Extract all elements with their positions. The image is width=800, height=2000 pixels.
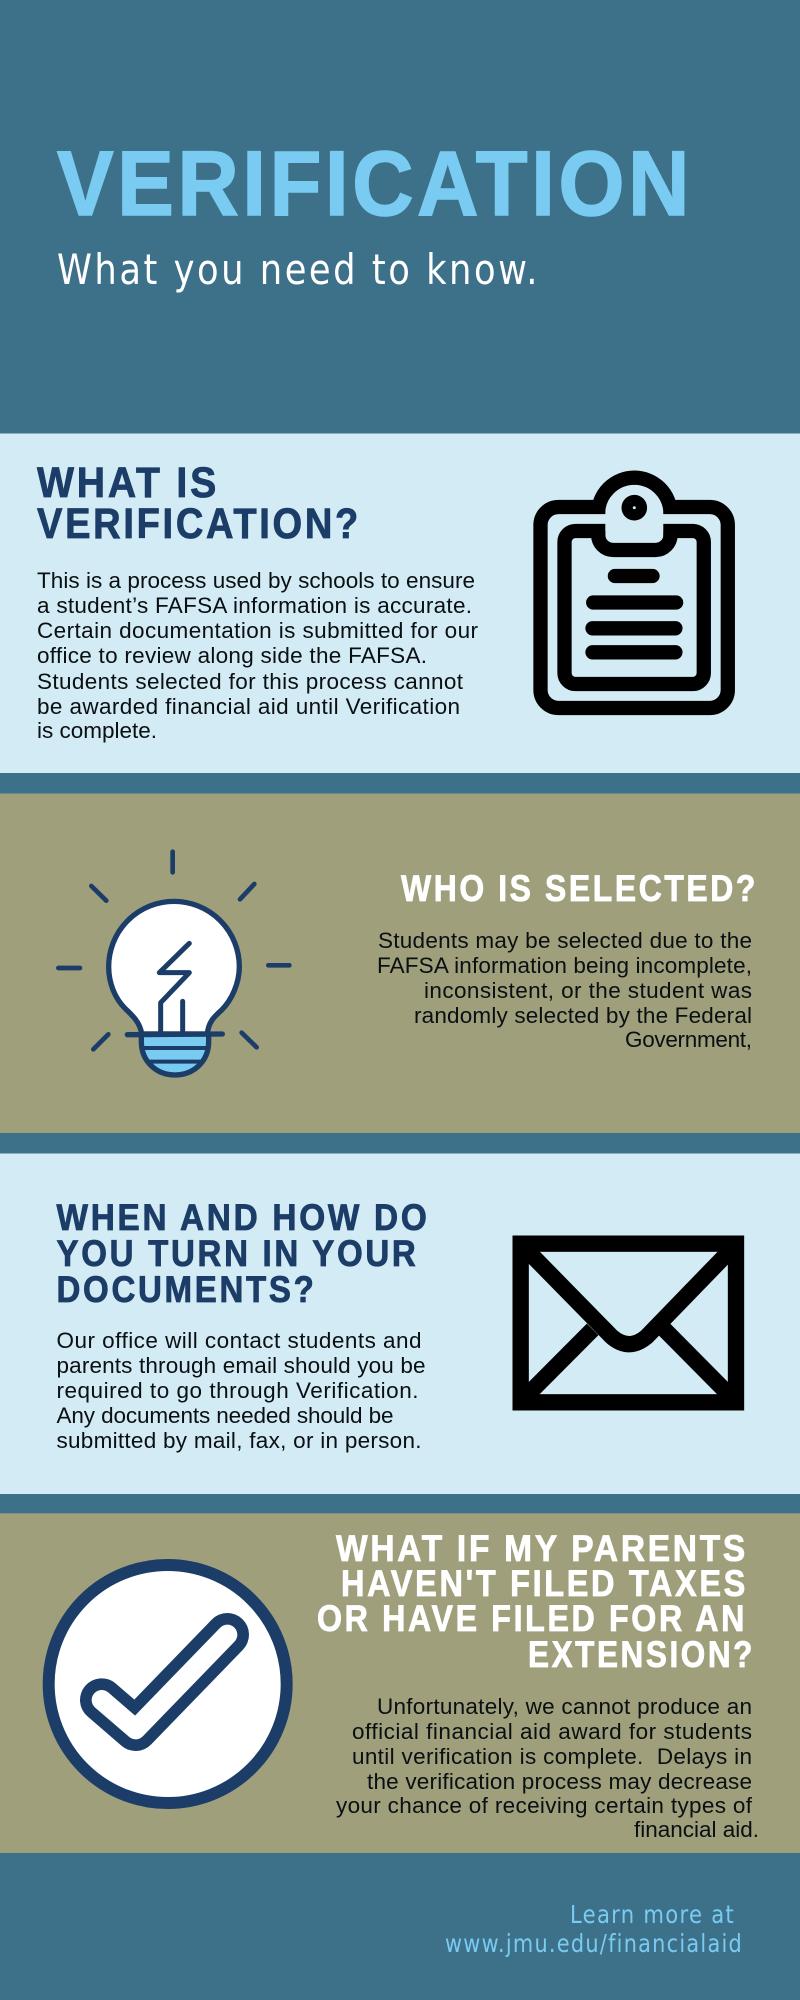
text block: what is verification: is complete. <box>37 718 157 743</box>
heading: parents taxes: EXTENSION? <box>528 1634 755 1675</box>
text block: parents taxes: the verification process may decrease <box>367 1769 752 1794</box>
text block: what is verification: a student’s FAFSA information is accurate. <box>37 593 472 618</box>
panel: parents taxes <box>0 1513 800 1853</box>
footer: learn more: Learn more at <box>570 1900 735 1929</box>
heading: when and how <box>56 1197 430 1310</box>
footer: learn more <box>445 1900 743 1958</box>
text block: when and how: Our office will contact students and <box>56 1328 422 1353</box>
heading: when and how: YOU TURN IN YOUR <box>56 1233 418 1274</box>
text block: parents taxes: until verification is complete. Delays in <box>352 1744 752 1769</box>
subtitle: What you need to know. <box>57 245 540 294</box>
icon: clipboard <box>540 478 728 708</box>
heading: what is verification <box>37 460 361 548</box>
text block: parents taxes: financial aid. <box>634 1817 759 1842</box>
text block: when and how: submitted by mail, fax, or in person. <box>56 1428 422 1453</box>
panel: when and how <box>0 1154 800 1494</box>
text block: when and how: parents through email should you be <box>56 1353 426 1378</box>
heading: what is verification: WHAT IS <box>37 460 219 507</box>
text block: what is verification: be awarded financial aid until Verification <box>37 694 460 719</box>
heading: what is verification: VERIFICATION? <box>37 501 361 548</box>
heading: parents taxes: WHAT IF MY PARENTS <box>336 1528 748 1569</box>
heading: parents taxes: HAVEN'T FILED TAXES <box>341 1563 748 1604</box>
text block: who is selected: Government, <box>625 1027 752 1052</box>
icon: light bulb <box>58 852 289 1075</box>
text block: who is selected: inconsistent, or the student was <box>424 978 752 1003</box>
icon: check mark <box>49 1565 287 1803</box>
text block: what is verification: Certain documentation is submitted for our <box>37 618 478 643</box>
heading: parents taxes: OR HAVE FILED FOR AN <box>317 1598 747 1639</box>
panel: what is verification <box>0 434 800 773</box>
header panel <box>0 0 800 434</box>
text block: what is verification: This is a process used by schools to ensure <box>37 568 475 593</box>
text block: parents taxes: official financial aid award for students <box>352 1719 752 1744</box>
text block: what is verification <box>37 568 478 743</box>
text block: who is selected: randomly selected by the Federal <box>414 1003 752 1028</box>
text block: who is selected <box>377 928 752 1052</box>
panel: who is selected <box>0 794 800 1133</box>
heading: parents taxes <box>317 1528 755 1675</box>
text block: who is selected: Students may be selected due to the <box>378 928 752 953</box>
text block: when and how <box>56 1328 426 1453</box>
icon: envelope <box>521 1244 736 1402</box>
text block: parents taxes <box>336 1694 759 1842</box>
text block: parents taxes: Unfortunately, we cannot produce an <box>377 1694 752 1719</box>
heading: when and how: DOCUMENTS? <box>56 1269 316 1310</box>
text block: when and how: Any documents needed should be <box>56 1403 394 1428</box>
text block: when and how: required to go through Verification. <box>56 1378 418 1403</box>
heading: when and how: WHEN AND HOW DO <box>56 1197 430 1238</box>
text block: what is verification: Students selected for this process cannot <box>37 669 464 694</box>
text block: parents taxes: your chance of receiving certain types of <box>336 1793 753 1818</box>
text block: who is selected: FAFSA information being incomplete, <box>377 953 752 978</box>
footer: learn more: www.jmu.edu/financialaid <box>445 1929 743 1958</box>
text block: what is verification: office to review along side the FAFSA. <box>37 643 427 668</box>
title: VERIFICATION <box>57 133 693 235</box>
